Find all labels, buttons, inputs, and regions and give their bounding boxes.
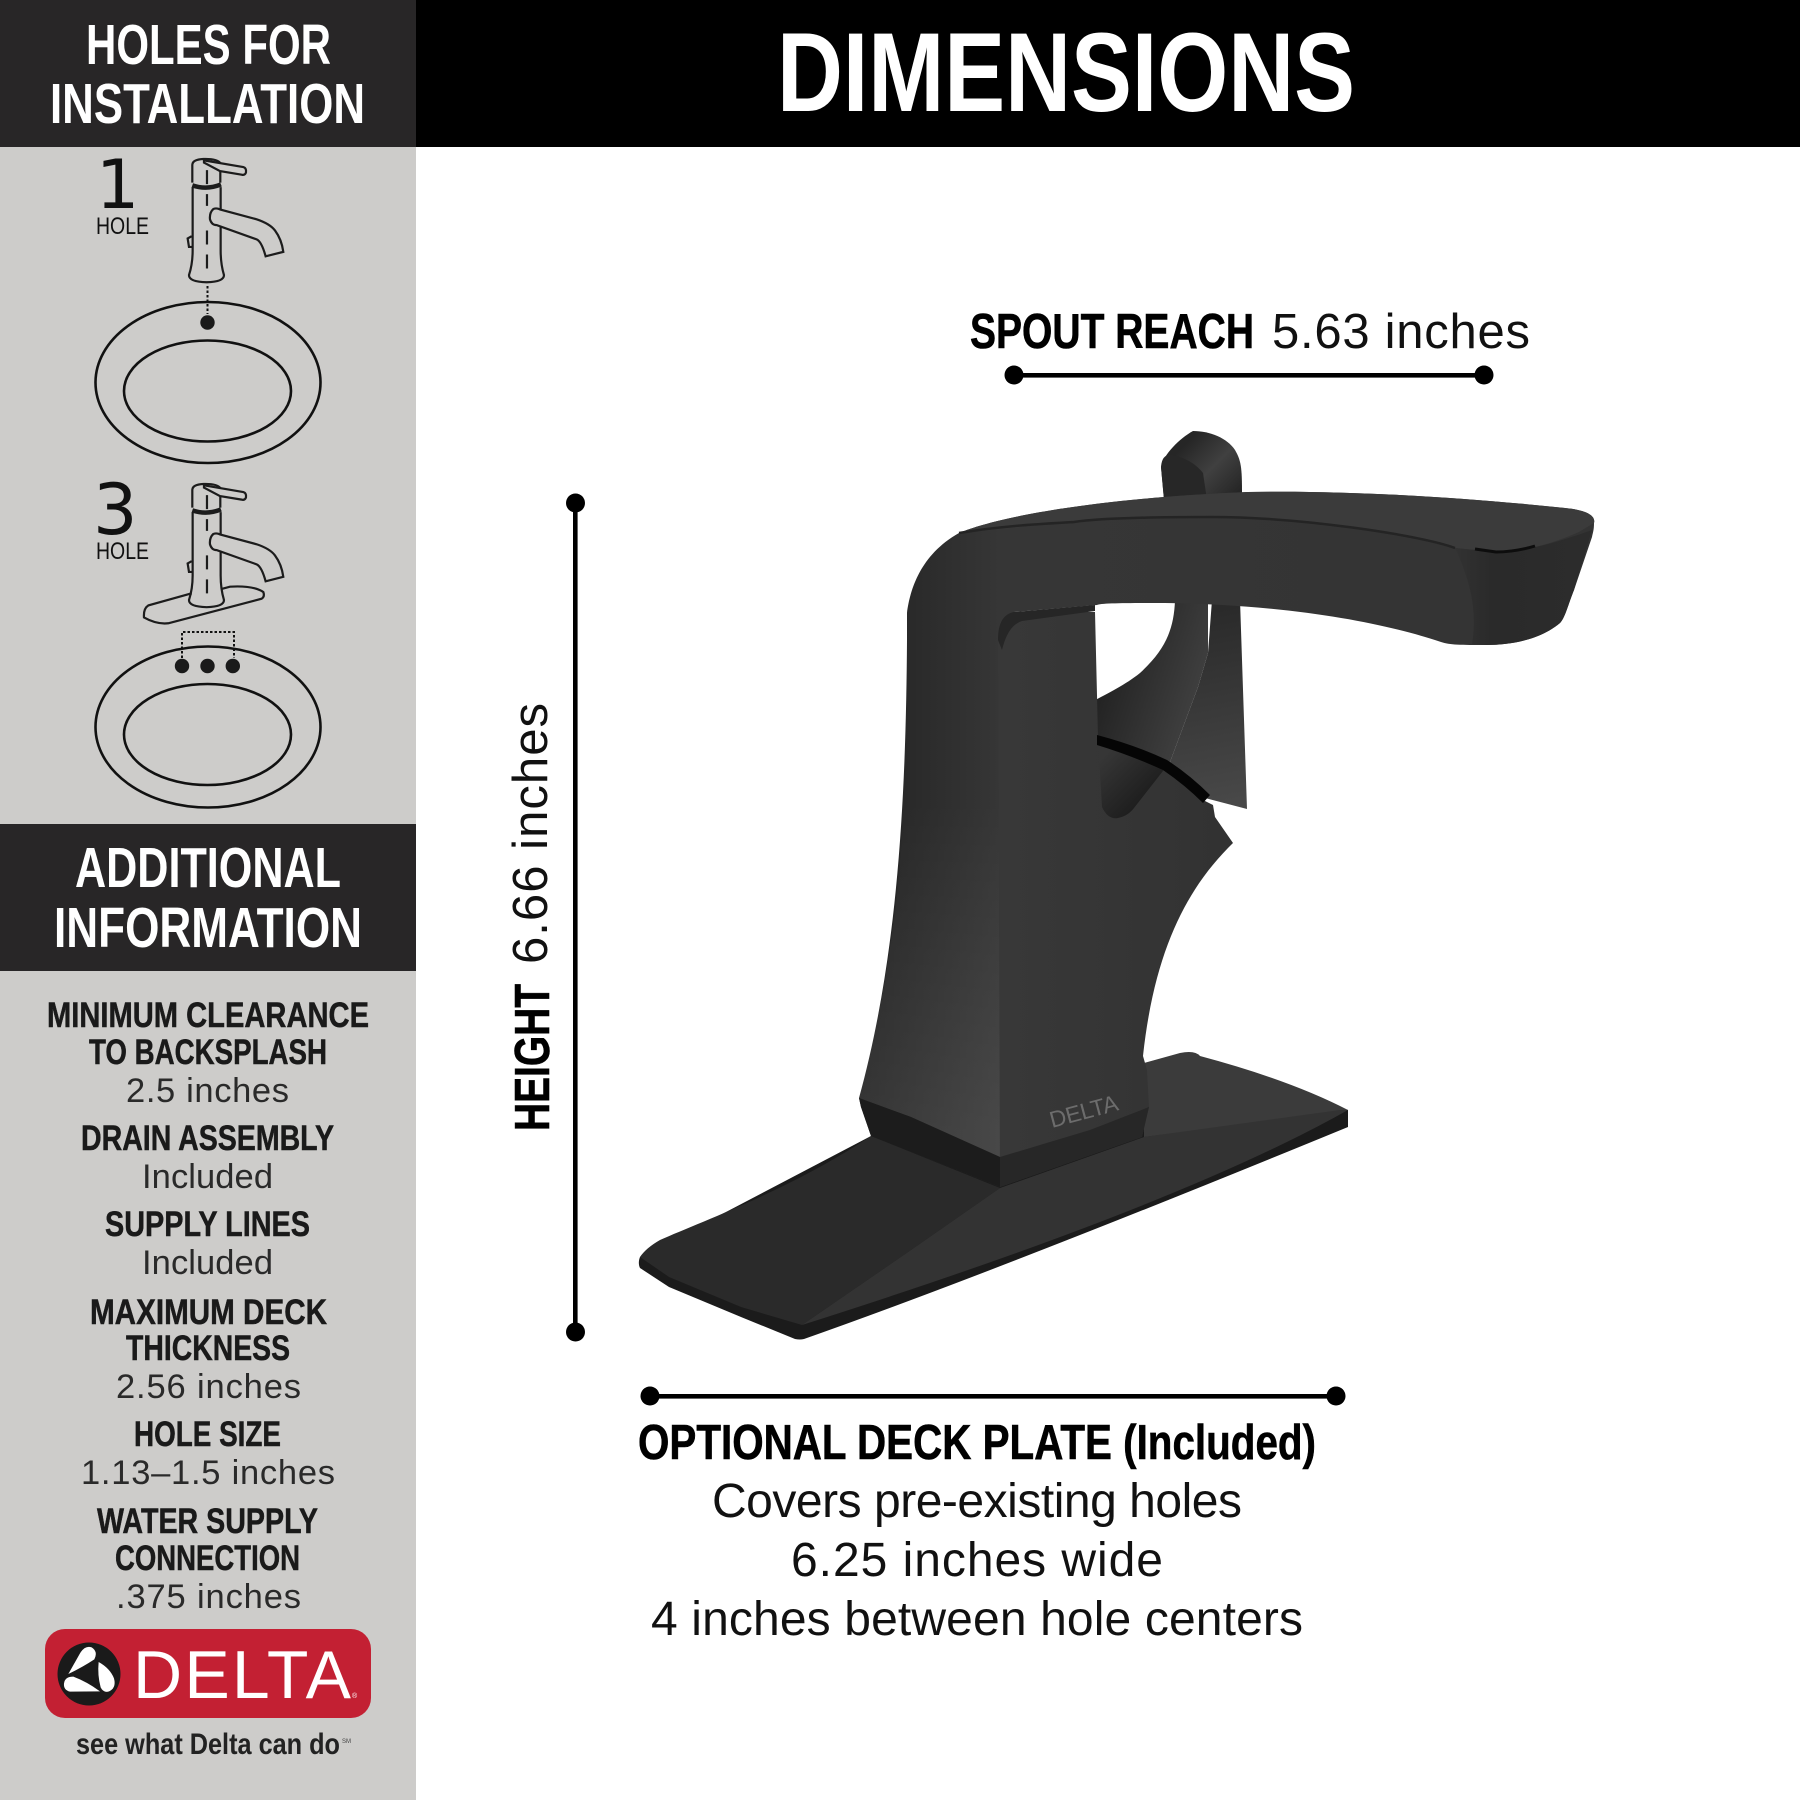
faucet body front face [998,612,1233,1187]
text block: additional information list: 2.56 inches [116,1368,301,1406]
header: holes for installation: HOLES FOR [86,13,331,77]
arrow: deck plate dimension line [640,1386,1346,1406]
text block: additional information list: TO BACKSPLASH [89,1033,327,1072]
icon: 1 hole installation: HOLE [96,213,149,240]
text block: additional information list: HOLE SIZE [134,1415,281,1454]
logo: delta [45,1629,371,1718]
header: additional information: INFORMATION [54,896,362,960]
lever handle blade [1170,600,1247,809]
text block: additional information list: MINIMUM CLEARANCE [47,996,369,1035]
illustration: black faucet with deck plate [639,431,1594,1340]
label: height: HEIGHT [506,984,560,1131]
text block: optional deck plate: 4 inches between hole centers [651,1593,1303,1646]
icon: sink with single hole [96,286,320,463]
logo: delta: ® [352,1692,358,1700]
label: spout reach: SPOUT REACH [970,305,1254,359]
faucet body left face [859,620,1000,1187]
title: dimensions: DIMENSIONS [777,10,1355,135]
pocket below the lever [1090,742,1170,835]
tagline: see what Delta can do [76,1728,340,1761]
text block: additional information list: WATER SUPPLY [97,1502,318,1541]
text block: additional information list: 1.13–1.5 inches [81,1454,335,1492]
text block: additional information list: Included [142,1158,273,1196]
label: spout reach: 5.63 inches [1272,305,1530,359]
spout [907,492,1594,650]
text block: optional deck plate: Covers pre-existing holes [712,1475,1242,1528]
icon: sink with three holes [96,632,320,808]
label: height: 6.66 inches [504,703,558,964]
arrow: height dimension line [566,494,585,1342]
text block: additional information list: MAXIMUM DECK [90,1293,327,1332]
header: holes for installation [0,0,416,147]
engraved brand mark: DELTA [1047,1089,1122,1133]
text block: additional information list [47,996,369,1616]
text block: additional information list: SUPPLY LINES [105,1205,310,1244]
icon: 3 hole installation with deck plate: HOLE [96,538,149,565]
text block: additional information list: .375 inches [116,1578,301,1616]
arrow: spout reach dimension line [1004,366,1494,384]
text block: additional information list: CONNECTION [115,1539,300,1578]
lever handle stem [1090,600,1208,762]
icon: 1 hole installation: 1 [96,146,139,225]
base chamfer [859,1098,1149,1187]
text block: additional information list: DRAIN ASSEMBLY [81,1119,334,1158]
text block: optional deck plate: 6.25 inches wide [791,1534,1163,1587]
tagline: SM [342,1739,351,1745]
deck plate [639,1052,1348,1340]
rear handle tip [1161,431,1242,500]
text block: additional information list: 2.5 inches [126,1072,289,1110]
icon: 3 hole installation with deck plate: 3 [93,469,138,551]
text block: optional deck plate: OPTIONAL DECK PLATE (Included) [638,1416,1316,1470]
icon: 1 hole installation [96,146,283,282]
sidebar panel background [0,0,416,1800]
text block: additional information list: THICKNESS [126,1329,290,1368]
label: height [504,703,560,1131]
slit between lever and body [1097,735,1210,803]
text block: optional deck plate [638,1416,1316,1646]
logo: delta: DELTA [133,1637,352,1713]
spout tip face [1455,530,1592,645]
header: holes for installation: INSTALLATION [50,72,365,136]
text block: additional information list: Included [142,1244,273,1282]
icon: 3 hole installation with deck plate [93,469,283,623]
spout underside shadow [998,605,1095,650]
header: additional information: ADDITIONAL [75,836,341,900]
spout top surface [959,492,1594,552]
header: additional information [0,824,416,971]
label: spout reach [970,305,1530,359]
title: dimensions [416,0,1800,147]
